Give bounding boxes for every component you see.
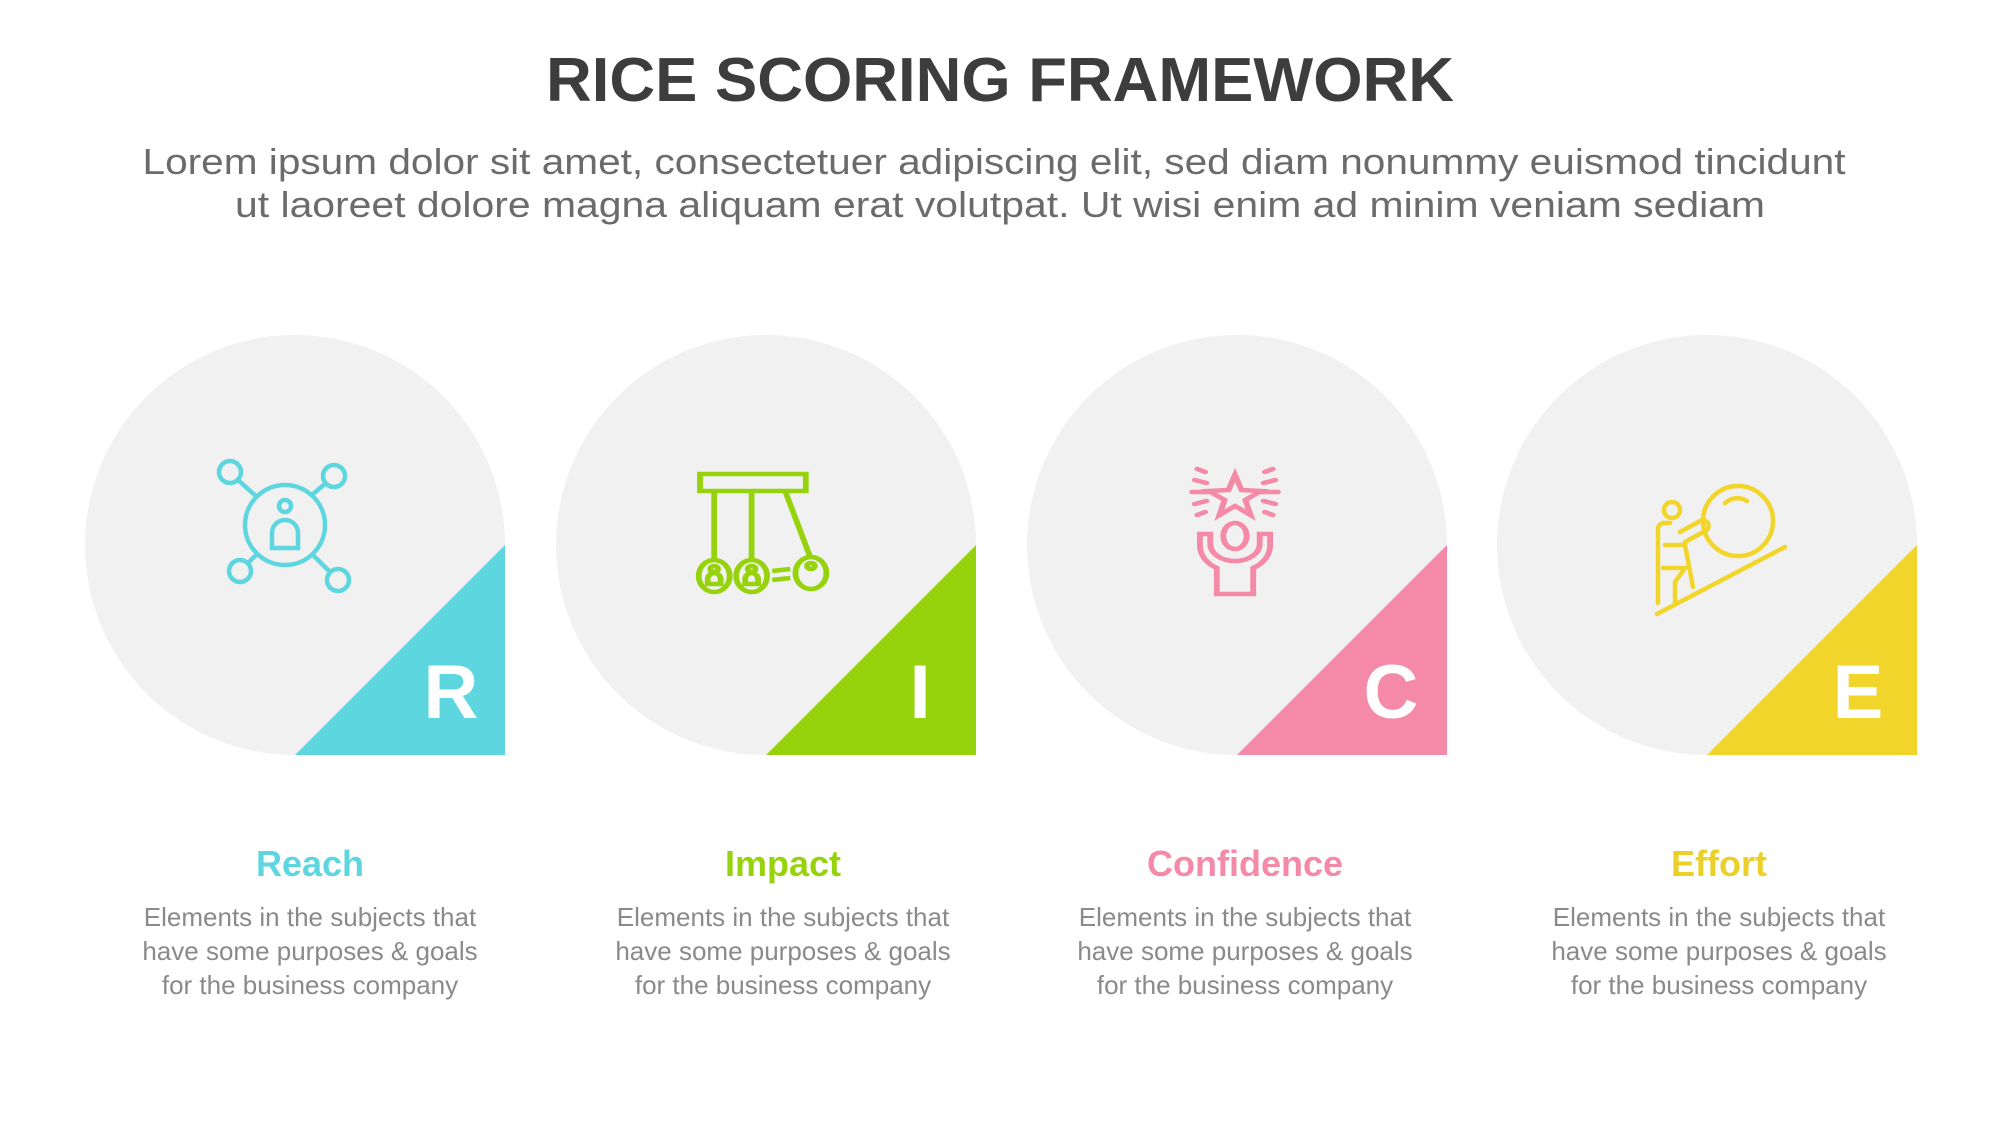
text: reach: Elements in the subjects that	[144, 902, 477, 932]
triangle: reach	[295, 545, 505, 755]
text: effort: Elements in the subjects that	[1553, 902, 1886, 932]
text: confidence: for the business company	[1097, 970, 1393, 1000]
circle: confidence	[1027, 335, 1447, 755]
text: reach: for the business company	[162, 970, 458, 1000]
icon: network person	[219, 461, 349, 591]
text: effort: for the business company	[1571, 970, 1867, 1000]
text: confidence: Elements in the subjects that	[1079, 902, 1412, 932]
panel: confidence	[1027, 335, 1447, 1000]
text: impact	[615, 902, 951, 1000]
icon: pushing boulder	[1657, 486, 1785, 614]
title: RICE SCORING FRAMEWORK	[546, 46, 1454, 115]
icon: person with star	[1192, 469, 1278, 594]
triangle: impact	[766, 545, 976, 755]
text: reach	[142, 902, 478, 1000]
heading: effort: Effort	[1671, 843, 1767, 884]
text: confidence	[1077, 902, 1413, 1000]
heading: confidence: Confidence	[1147, 843, 1343, 884]
letter E: E	[1833, 650, 1883, 735]
panel: reach	[85, 335, 505, 1000]
triangle: confidence	[1237, 545, 1447, 755]
text: impact: Elements in the subjects that	[617, 902, 950, 932]
circle: impact	[556, 335, 976, 755]
text: effort: have some purposes & goals	[1551, 936, 1887, 966]
panel: effort	[1497, 335, 1917, 1000]
letter C: C	[1364, 650, 1418, 735]
text: impact: for the business company	[635, 970, 931, 1000]
heading: impact: Impact	[725, 843, 841, 884]
triangle: effort	[1707, 545, 1917, 755]
letter R: R	[424, 650, 478, 735]
panel: impact	[556, 335, 976, 1000]
text: effort	[1551, 902, 1887, 1000]
text: reach: have some purposes & goals	[142, 936, 478, 966]
subtitle: Lorem ipsum dolor sit amet, consectetuer adipiscing elit, sed diam nonummy euismod tincidunt	[142, 141, 1846, 182]
heading: reach: Reach	[256, 843, 364, 884]
text: impact: have some purposes & goals	[615, 936, 951, 966]
text: confidence: have some purposes & goals	[1077, 936, 1413, 966]
icon: newton cradle	[699, 474, 826, 592]
circle: effort	[1497, 335, 1917, 755]
letter I: I	[909, 650, 931, 735]
subtitle: ut laoreet dolore magna aliquam erat volutpat. Ut wisi enim ad minim veniam sediam	[235, 184, 1765, 225]
circle: reach	[85, 335, 505, 755]
subtitle	[142, 141, 1846, 225]
